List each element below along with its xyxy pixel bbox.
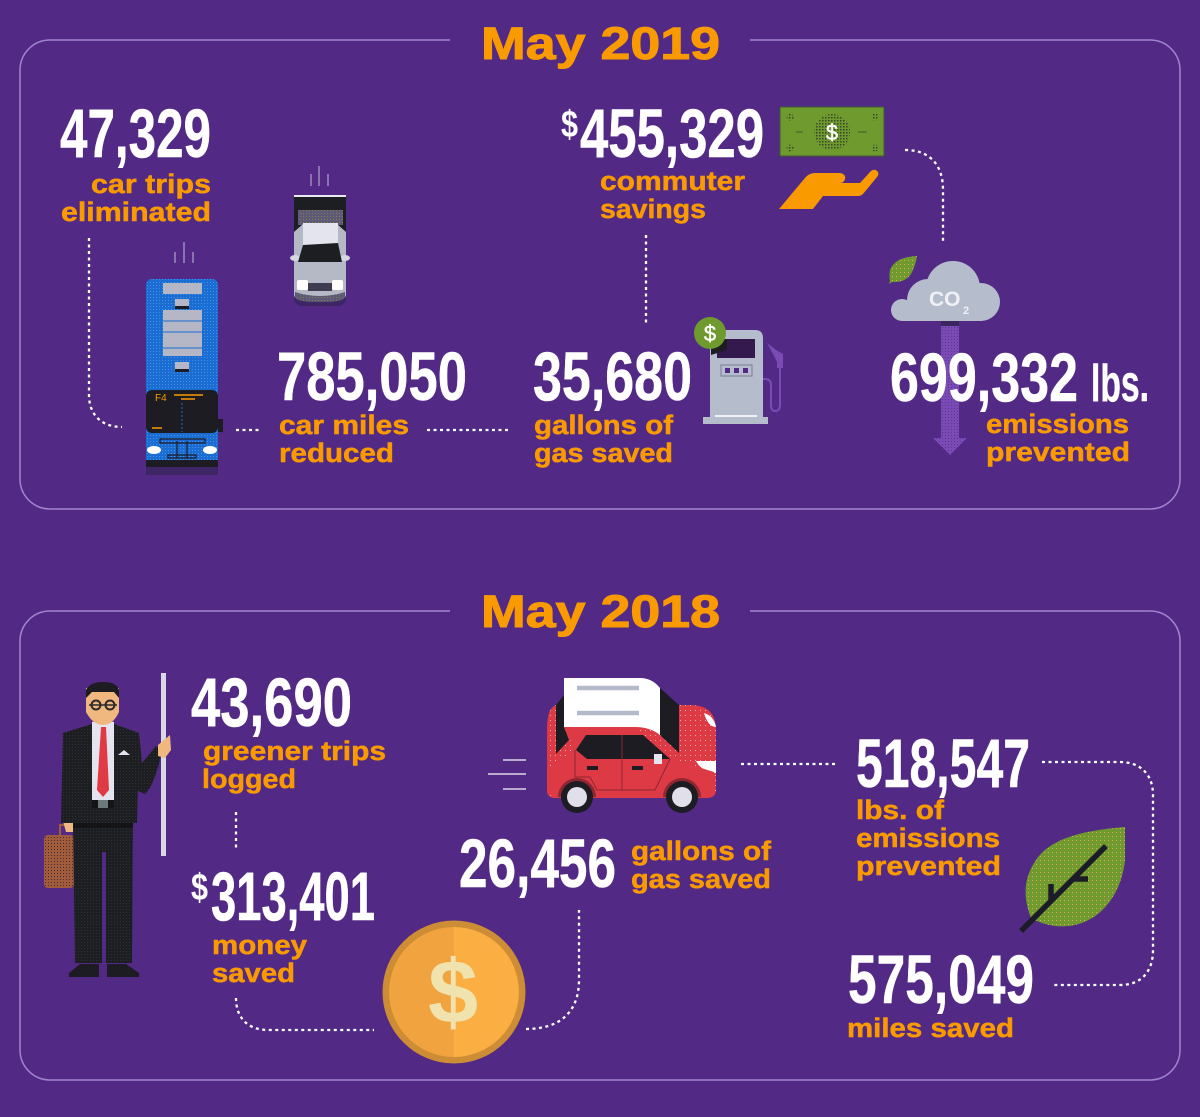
connector: savings to gallons xyxy=(645,235,647,326)
connector: trips to money xyxy=(235,812,237,851)
icon: banknote: $ xyxy=(826,120,838,145)
label: car trips eliminated xyxy=(61,169,211,227)
label: lbs. of emissions prevented: emissions xyxy=(856,823,1000,853)
stat: car trips eliminated xyxy=(60,95,211,227)
icon: large leaf xyxy=(1021,827,1125,931)
connector: bus to miles xyxy=(236,429,262,431)
icon: emissions arrow xyxy=(933,321,967,455)
icon: gas pump xyxy=(694,317,783,424)
label: gallons of gas saved: gas saved xyxy=(534,438,673,468)
label: gallons of gas saved xyxy=(631,836,772,894)
panel: May 2019 xyxy=(20,18,1180,509)
stat: greener trips logged xyxy=(191,664,386,794)
label: greener trips logged: logged xyxy=(202,764,296,794)
icon: red car xyxy=(488,678,716,813)
stat: gallons of gas saved xyxy=(459,825,772,902)
number: 47,329: 47,329 xyxy=(60,95,211,172)
label: gallons of gas saved: gallons of xyxy=(534,410,674,440)
icon: bus: F4 xyxy=(155,393,167,404)
stat: emissions prevented xyxy=(890,339,1149,467)
number: 518,547: 518,547 xyxy=(856,725,1030,802)
label: lbs. of emissions prevented xyxy=(856,795,1001,881)
icon: banknote xyxy=(780,107,884,156)
number: 43,690: 43,690 xyxy=(191,664,352,741)
number: 575,049: 575,049 xyxy=(848,941,1034,1018)
icon: commuter man with pole xyxy=(44,673,171,977)
label: emissions prevented xyxy=(986,409,1130,467)
connector: car to emissions xyxy=(741,763,838,765)
number: $313,401 xyxy=(191,858,375,935)
icon: CO2 cloud: CO xyxy=(929,288,960,311)
stat: car miles reduced xyxy=(277,338,467,468)
label: greener trips logged: greener trips xyxy=(203,736,386,766)
label: money saved xyxy=(212,930,307,988)
connector: trips to bus xyxy=(89,238,122,427)
number: 26,456: 26,456 xyxy=(459,825,616,902)
label: commuter savings: savings xyxy=(600,194,706,224)
stat: money saved xyxy=(191,858,375,988)
number: 785,050: 785,050 xyxy=(277,338,467,415)
heading: May 2019: May 2019 xyxy=(481,18,720,69)
label: lbs. of emissions prevented: prevented xyxy=(856,851,1001,881)
icon: gas pump: $ xyxy=(704,321,716,346)
number: 699,332 lbs.: 699,332 xyxy=(890,339,1078,416)
label: car miles reduced: car miles xyxy=(279,410,409,440)
label: car miles reduced xyxy=(279,410,409,468)
heading: May 2018: May 2018 xyxy=(481,586,720,637)
panel frame 2019 xyxy=(20,40,1180,509)
icon: gold coin: $ xyxy=(428,943,478,1043)
label: car miles reduced: reduced xyxy=(279,438,394,468)
icon: bus xyxy=(146,242,223,475)
number: 699,332 lbs.: lbs. xyxy=(1091,355,1149,413)
label: gallons of gas saved: gas saved xyxy=(631,864,771,894)
connector: coin to gallons xyxy=(526,910,579,1029)
connector: emissions to miles xyxy=(1042,762,1153,985)
number: $313,401: $ xyxy=(191,867,208,909)
label: money saved: saved xyxy=(212,958,295,988)
label: miles saved: miles saved xyxy=(847,1013,1014,1043)
label: commuter savings xyxy=(600,166,746,224)
connector: miles to gallons xyxy=(427,429,510,431)
label: greener trips logged xyxy=(202,736,386,794)
connector: money to coin xyxy=(236,998,374,1030)
icon: CO2 cloud xyxy=(891,261,1000,321)
number: 35,680: 35,680 xyxy=(533,338,692,415)
icon: small leaf xyxy=(889,256,917,284)
label: lbs. of emissions prevented: lbs. of xyxy=(856,795,945,825)
label: commuter savings: commuter xyxy=(600,166,746,196)
icon: CO2 cloud: 2 xyxy=(963,305,969,317)
label: emissions prevented: emissions xyxy=(986,409,1129,439)
panel frame 2018 xyxy=(20,611,1180,1080)
icon: open hand xyxy=(779,170,878,209)
label: car trips eliminated: car trips xyxy=(91,169,211,199)
label: gallons of gas saved xyxy=(534,410,674,468)
number: $455,329: 455,329 xyxy=(580,95,764,172)
label: gallons of gas saved: gallons of xyxy=(631,836,772,866)
stat: commuter savings xyxy=(561,95,764,224)
connector: cash to cloud xyxy=(905,150,943,244)
panel: May 2018 xyxy=(20,586,1180,1080)
icon: gold coin xyxy=(382,920,526,1064)
number: $455,329 xyxy=(561,95,764,172)
number: $313,401: 313,401 xyxy=(211,858,375,935)
stat: miles saved xyxy=(847,941,1034,1043)
label: car trips eliminated: eliminated xyxy=(61,197,211,227)
stat: lbs. of emissions prevented xyxy=(856,725,1030,881)
icon: car top view xyxy=(290,166,350,306)
label: money saved: money xyxy=(212,930,307,960)
stat: gallons of gas saved xyxy=(533,338,692,468)
label: emissions prevented: prevented xyxy=(986,437,1130,467)
number: $455,329: $ xyxy=(561,104,578,146)
